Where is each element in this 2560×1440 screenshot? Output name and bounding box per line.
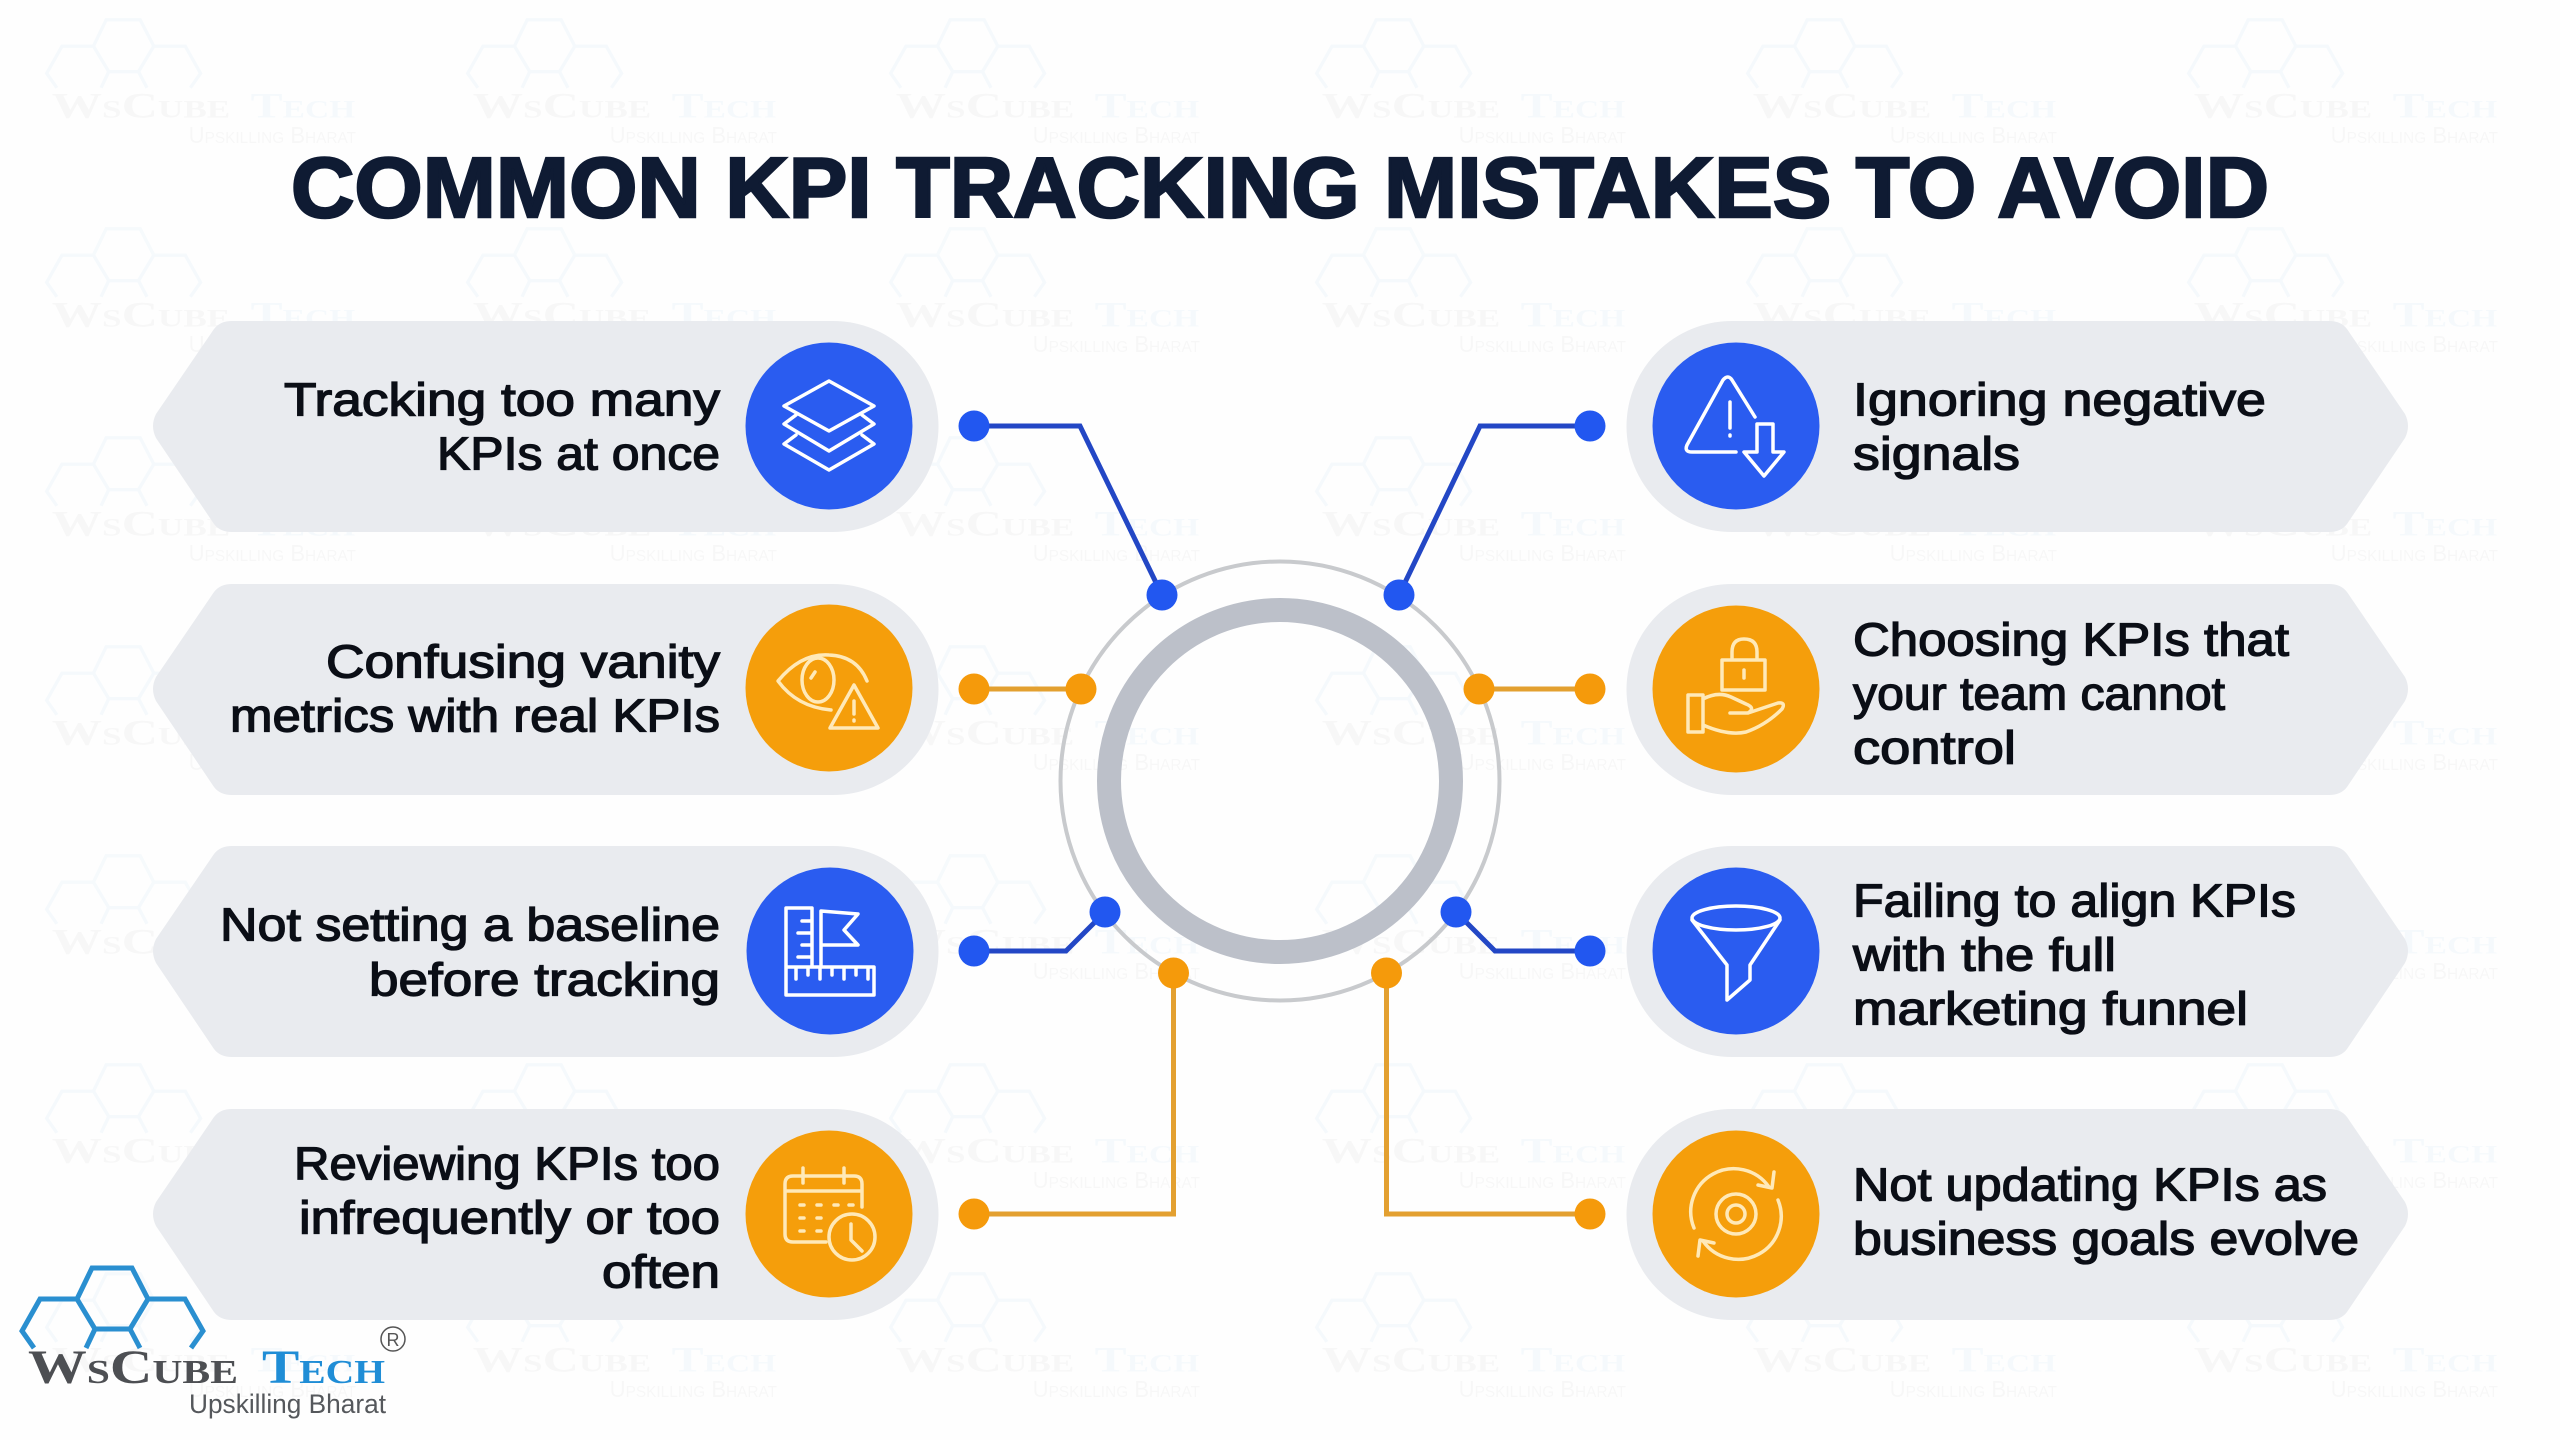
text: choosing KPIs that your team cannot control [1853, 614, 2289, 774]
watermark pattern: Upskilling Bharat [2331, 122, 2498, 148]
watermark pattern: Upskilling Bharat [610, 1376, 777, 1402]
watermark pattern: Tech [1521, 1131, 1626, 1171]
watermark pattern: Upskilling Bharat [2331, 1167, 2498, 1193]
text: failing to align KPIs with the full marketing funnel: with the full [1852, 928, 2116, 980]
connector: not setting a baseline [958, 896, 1120, 966]
watermark pattern: Tech [251, 922, 356, 962]
watermark pattern: Tech [672, 86, 777, 126]
icon: ruler and flag [746, 868, 914, 1034]
watermark pattern: WsCube [896, 504, 1074, 544]
connector: choosing KPIs team cannot control [1464, 674, 1606, 704]
watermark pattern: WsCube [52, 922, 230, 962]
text: tracking too many KPIs at once: Tracking too many [284, 374, 720, 426]
watermark pattern: Upskilling Bharat [610, 1167, 777, 1193]
watermark pattern: Tech [1095, 1340, 1200, 1380]
panel: reviewing KPIs too infrequently [153, 1109, 938, 1320]
watermark pattern: Tech [672, 1340, 777, 1380]
watermark pattern: Tech [1095, 86, 1200, 126]
panel: ignoring negative signals [1627, 321, 2408, 532]
watermark pattern: WsCube [52, 1340, 230, 1380]
watermark pattern: Tech [1521, 922, 1626, 962]
icon: target with refresh arrows [1652, 1130, 1820, 1298]
watermark pattern: Upskilling Bharat [610, 540, 777, 566]
watermark pattern: Upskilling Bharat [189, 958, 356, 984]
text: failing to align KPIs with the full marketing funnel: marketing funnel [1853, 982, 2248, 1034]
panel: failing to align KPIs [1627, 846, 2408, 1057]
watermark pattern: Upskilling Bharat [1033, 331, 1200, 357]
watermark pattern: WsCube [1753, 504, 1931, 544]
watermark pattern: WsCube [1322, 1131, 1500, 1171]
watermark pattern: Tech [672, 922, 777, 962]
watermark pattern: WsCube [1322, 295, 1500, 335]
watermark pattern: Upskilling Bharat [1459, 122, 1626, 148]
watermark pattern: Upskilling Bharat [1459, 958, 1626, 984]
watermark pattern: Upskilling Bharat [189, 540, 356, 566]
watermark pattern: Upskilling Bharat [1459, 540, 1626, 566]
watermark pattern: WsCube [473, 295, 651, 335]
watermark pattern: Upskilling Bharat [610, 122, 777, 148]
text: not setting a baseline before tracking: Not setting a baseline [220, 898, 720, 950]
watermark pattern: Upskilling Bharat [1459, 1167, 1626, 1193]
watermark pattern: Tech [1095, 504, 1200, 544]
watermark pattern: WsCube [52, 504, 230, 544]
watermark pattern: Upskilling Bharat [1033, 1167, 1200, 1193]
watermark pattern: WsCube [1322, 713, 1500, 753]
watermark pattern: WsCube [1753, 1131, 1931, 1171]
watermark pattern: Tech [251, 86, 356, 126]
watermark pattern: Tech [1952, 1340, 2057, 1380]
logo wordmark [28, 1327, 405, 1419]
connector: not updating KPIs [1371, 958, 1606, 1230]
watermark pattern: Tech [1952, 1131, 2057, 1171]
text: reviewing KPIs too infrequently or too often: infrequently or too [299, 1192, 720, 1244]
watermark pattern: Upskilling Bharat [2331, 1376, 2498, 1402]
watermark pattern: Tech [2393, 713, 2498, 753]
icon: eye with warning [746, 604, 912, 772]
watermark pattern: Upskilling Bharat [2331, 540, 2498, 566]
connector: failing to align KPIs [1440, 896, 1606, 966]
text: reviewing KPIs too infrequently or too often [294, 1138, 720, 1298]
text: ignoring negative signals: Ignoring negative [1853, 374, 2266, 426]
watermark pattern: Upskilling Bharat [1890, 958, 2057, 984]
text: tracking too many KPIs at once [284, 374, 720, 480]
text: not setting a baseline before tracking [220, 898, 720, 1006]
watermark pattern: Tech [2393, 1131, 2498, 1171]
watermark pattern: Upskilling Bharat [189, 331, 356, 357]
panel: not setting a baseline [153, 846, 938, 1057]
watermark pattern: Tech [1521, 86, 1626, 126]
watermark pattern: Upskilling Bharat [1890, 1167, 2057, 1193]
logo wordmark: R [386, 1330, 400, 1350]
watermark pattern: WsCube [473, 86, 651, 126]
text: not updating KPIs as business goals evolve [1853, 1158, 2359, 1264]
logo wordmark: TECH [262, 1341, 385, 1394]
watermark pattern: Tech [1952, 295, 2057, 335]
watermark pattern: Tech [2393, 295, 2498, 335]
connector: ignoring negative signals [1384, 410, 1606, 610]
logo: WsCube Tech [22, 1268, 405, 1419]
watermark pattern: Tech [2393, 504, 2498, 544]
watermark pattern: WsCube [1753, 922, 1931, 962]
watermark pattern: Upskilling Bharat [1890, 1376, 2057, 1402]
watermark pattern: WsCube [1322, 1340, 1500, 1380]
watermark pattern: WsCube [473, 713, 651, 753]
watermark pattern: WsCube [896, 922, 1074, 962]
watermark pattern: WsCube [1322, 86, 1500, 126]
text: failing to align KPIs with the full marketing funnel: Failing to align KPIs [1853, 874, 2296, 926]
watermark pattern: WsCube [473, 1131, 651, 1171]
watermark pattern: WsCube [896, 713, 1074, 753]
watermark pattern: Tech [251, 295, 356, 335]
watermark pattern: Upskilling Bharat [1459, 1376, 1626, 1402]
text: not updating KPIs as business goals evolve: business goals evolve [1853, 1212, 2359, 1264]
watermark pattern: WsCube [896, 295, 1074, 335]
text: choosing KPIs that your team cannot control: control [1853, 722, 2016, 774]
watermark pattern: Tech [1952, 86, 2057, 126]
watermark pattern: Upskilling Bharat [189, 749, 356, 775]
icon: layers [746, 342, 912, 510]
watermark pattern: Tech [1521, 713, 1626, 753]
text: choosing KPIs that your team cannot control: Choosing KPIs that [1853, 614, 2289, 666]
watermark pattern: Upskilling Bharat [1033, 749, 1200, 775]
watermark pattern: Upskilling Bharat [610, 331, 777, 357]
watermark pattern: Upskilling Bharat [1033, 540, 1200, 566]
watermark pattern: WsCube [2194, 504, 2372, 544]
watermark pattern: Tech [1952, 922, 2057, 962]
watermark pattern: Tech [251, 504, 356, 544]
watermark pattern: WsCube [2194, 295, 2372, 335]
panel: choosing KPIs team cannot control [1627, 584, 2408, 795]
connector: confusing vanity metrics [958, 674, 1096, 704]
watermark pattern: Upskilling Bharat [1890, 122, 2057, 148]
watermark pattern: Tech [251, 1131, 356, 1171]
connector: reviewing KPIs [958, 958, 1189, 1230]
watermark pattern: Upskilling Bharat [189, 1167, 356, 1193]
text: confusing vanity metrics with real KPIs: metrics with real KPIs [230, 690, 720, 742]
watermark pattern: Upskilling Bharat [2331, 749, 2498, 775]
watermark pattern: Tech [251, 713, 356, 753]
watermark pattern: WsCube [2194, 922, 2372, 962]
icon: warning with down arrow [1652, 342, 1820, 510]
central ring diagram [1060, 562, 1500, 1000]
watermark pattern: Upskilling Bharat [1459, 749, 1626, 775]
watermark pattern: WsCube [2194, 1340, 2372, 1380]
watermark pattern: Tech [2393, 86, 2498, 126]
text: ignoring negative signals [1853, 374, 2266, 480]
watermark pattern: WsCube [1753, 713, 1931, 753]
watermark pattern: Tech [1095, 1131, 1200, 1171]
logo wordmark: Upskilling Bharat [189, 1389, 386, 1419]
watermark pattern: Upskilling Bharat [1033, 1376, 1200, 1402]
watermark pattern: WsCube [1322, 922, 1500, 962]
watermark pattern: WsCube [2194, 713, 2372, 753]
watermark pattern: Tech [1095, 922, 1200, 962]
watermark pattern: Tech [2393, 922, 2498, 962]
watermark pattern: Upskilling Bharat [1033, 958, 1200, 984]
watermark pattern: Upskilling Bharat [1033, 122, 1200, 148]
watermark pattern: Tech [1521, 295, 1626, 335]
title: COMMON KPI TRACKING MISTAKES TO AVOID [291, 141, 2269, 236]
watermark pattern: Tech [251, 1340, 356, 1380]
text: confusing vanity metrics with real KPIs [230, 636, 720, 742]
watermark pattern: WsCube [896, 86, 1074, 126]
watermark pattern: Upskilling Bharat [1890, 749, 2057, 775]
watermark pattern: Upskilling Bharat [2331, 331, 2498, 357]
watermark pattern: WsCube [52, 295, 230, 335]
connector: tracking too many KPIs [958, 410, 1178, 610]
watermark pattern: Upskilling Bharat [610, 958, 777, 984]
text: reviewing KPIs too infrequently or too often: often [602, 1246, 720, 1298]
watermark pattern: WsCube [2194, 86, 2372, 126]
watermark pattern: Upskilling Bharat [1890, 540, 2057, 566]
panel: confusing vanity metrics [153, 584, 938, 795]
icon: calendar with clock [746, 1130, 912, 1298]
text: reviewing KPIs too infrequently or too often: Reviewing KPIs too [294, 1138, 720, 1190]
watermark pattern: WsCube [473, 504, 651, 544]
watermark pattern: Tech [1521, 1340, 1626, 1380]
watermark pattern: WsCube [1753, 86, 1931, 126]
icon: hexagons [22, 1268, 203, 1348]
watermark pattern: WsCube [896, 1131, 1074, 1171]
watermark pattern: WsCube [52, 1131, 230, 1171]
watermark pattern: WsCube [1753, 295, 1931, 335]
watermark pattern: Upskilling Bharat [189, 122, 356, 148]
watermark pattern: Tech [672, 713, 777, 753]
text: not setting a baseline before tracking: before tracking [369, 954, 720, 1006]
watermark pattern: WsCube [52, 713, 230, 753]
watermark pattern: WsCube [473, 922, 651, 962]
watermark pattern: Tech [1952, 504, 2057, 544]
watermark pattern: WsCube [473, 1340, 651, 1380]
watermark pattern: Tech [672, 295, 777, 335]
text: choosing KPIs that your team cannot control: your team cannot [1853, 668, 2225, 720]
text: not updating KPIs as business goals evolve: Not updating KPIs as [1853, 1158, 2327, 1210]
watermark pattern: Tech [672, 504, 777, 544]
watermark pattern: WsCube [896, 1340, 1074, 1380]
text: confusing vanity metrics with real KPIs: Confusing vanity [326, 636, 720, 688]
watermark pattern: Tech [1095, 713, 1200, 753]
logo wordmark: W SCUBE [28, 1341, 238, 1394]
watermark pattern: Tech [2393, 1340, 2498, 1380]
watermark pattern: WsCube [2194, 1131, 2372, 1171]
text: ignoring negative signals: signals [1853, 428, 2020, 480]
watermark pattern: Upskilling Bharat [2331, 958, 2498, 984]
watermark pattern: Tech [1095, 295, 1200, 335]
panel: not updating KPIs [1627, 1109, 2408, 1320]
panel: tracking too many KPIs [153, 321, 938, 532]
text: tracking too many KPIs at once: KPIs at once [437, 428, 720, 480]
watermark pattern: Tech [1952, 713, 2057, 753]
watermark pattern: Tech [672, 1131, 777, 1171]
watermark pattern: Upskilling Bharat [1459, 331, 1626, 357]
watermark pattern: WsCube [52, 86, 230, 126]
watermark pattern: Upskilling Bharat [1890, 331, 2057, 357]
text: failing to align KPIs with the full marketing funnel [1852, 874, 2296, 1034]
watermark pattern: WsCube [1753, 1340, 1931, 1380]
watermark pattern: WsCube [1322, 504, 1500, 544]
watermark pattern: Upskilling Bharat [610, 749, 777, 775]
watermark pattern: Upskilling Bharat [189, 1376, 356, 1402]
icon: funnel [1652, 868, 1820, 1034]
icon: lock over open hand [1652, 606, 1820, 772]
watermark pattern: Tech [1521, 504, 1626, 544]
